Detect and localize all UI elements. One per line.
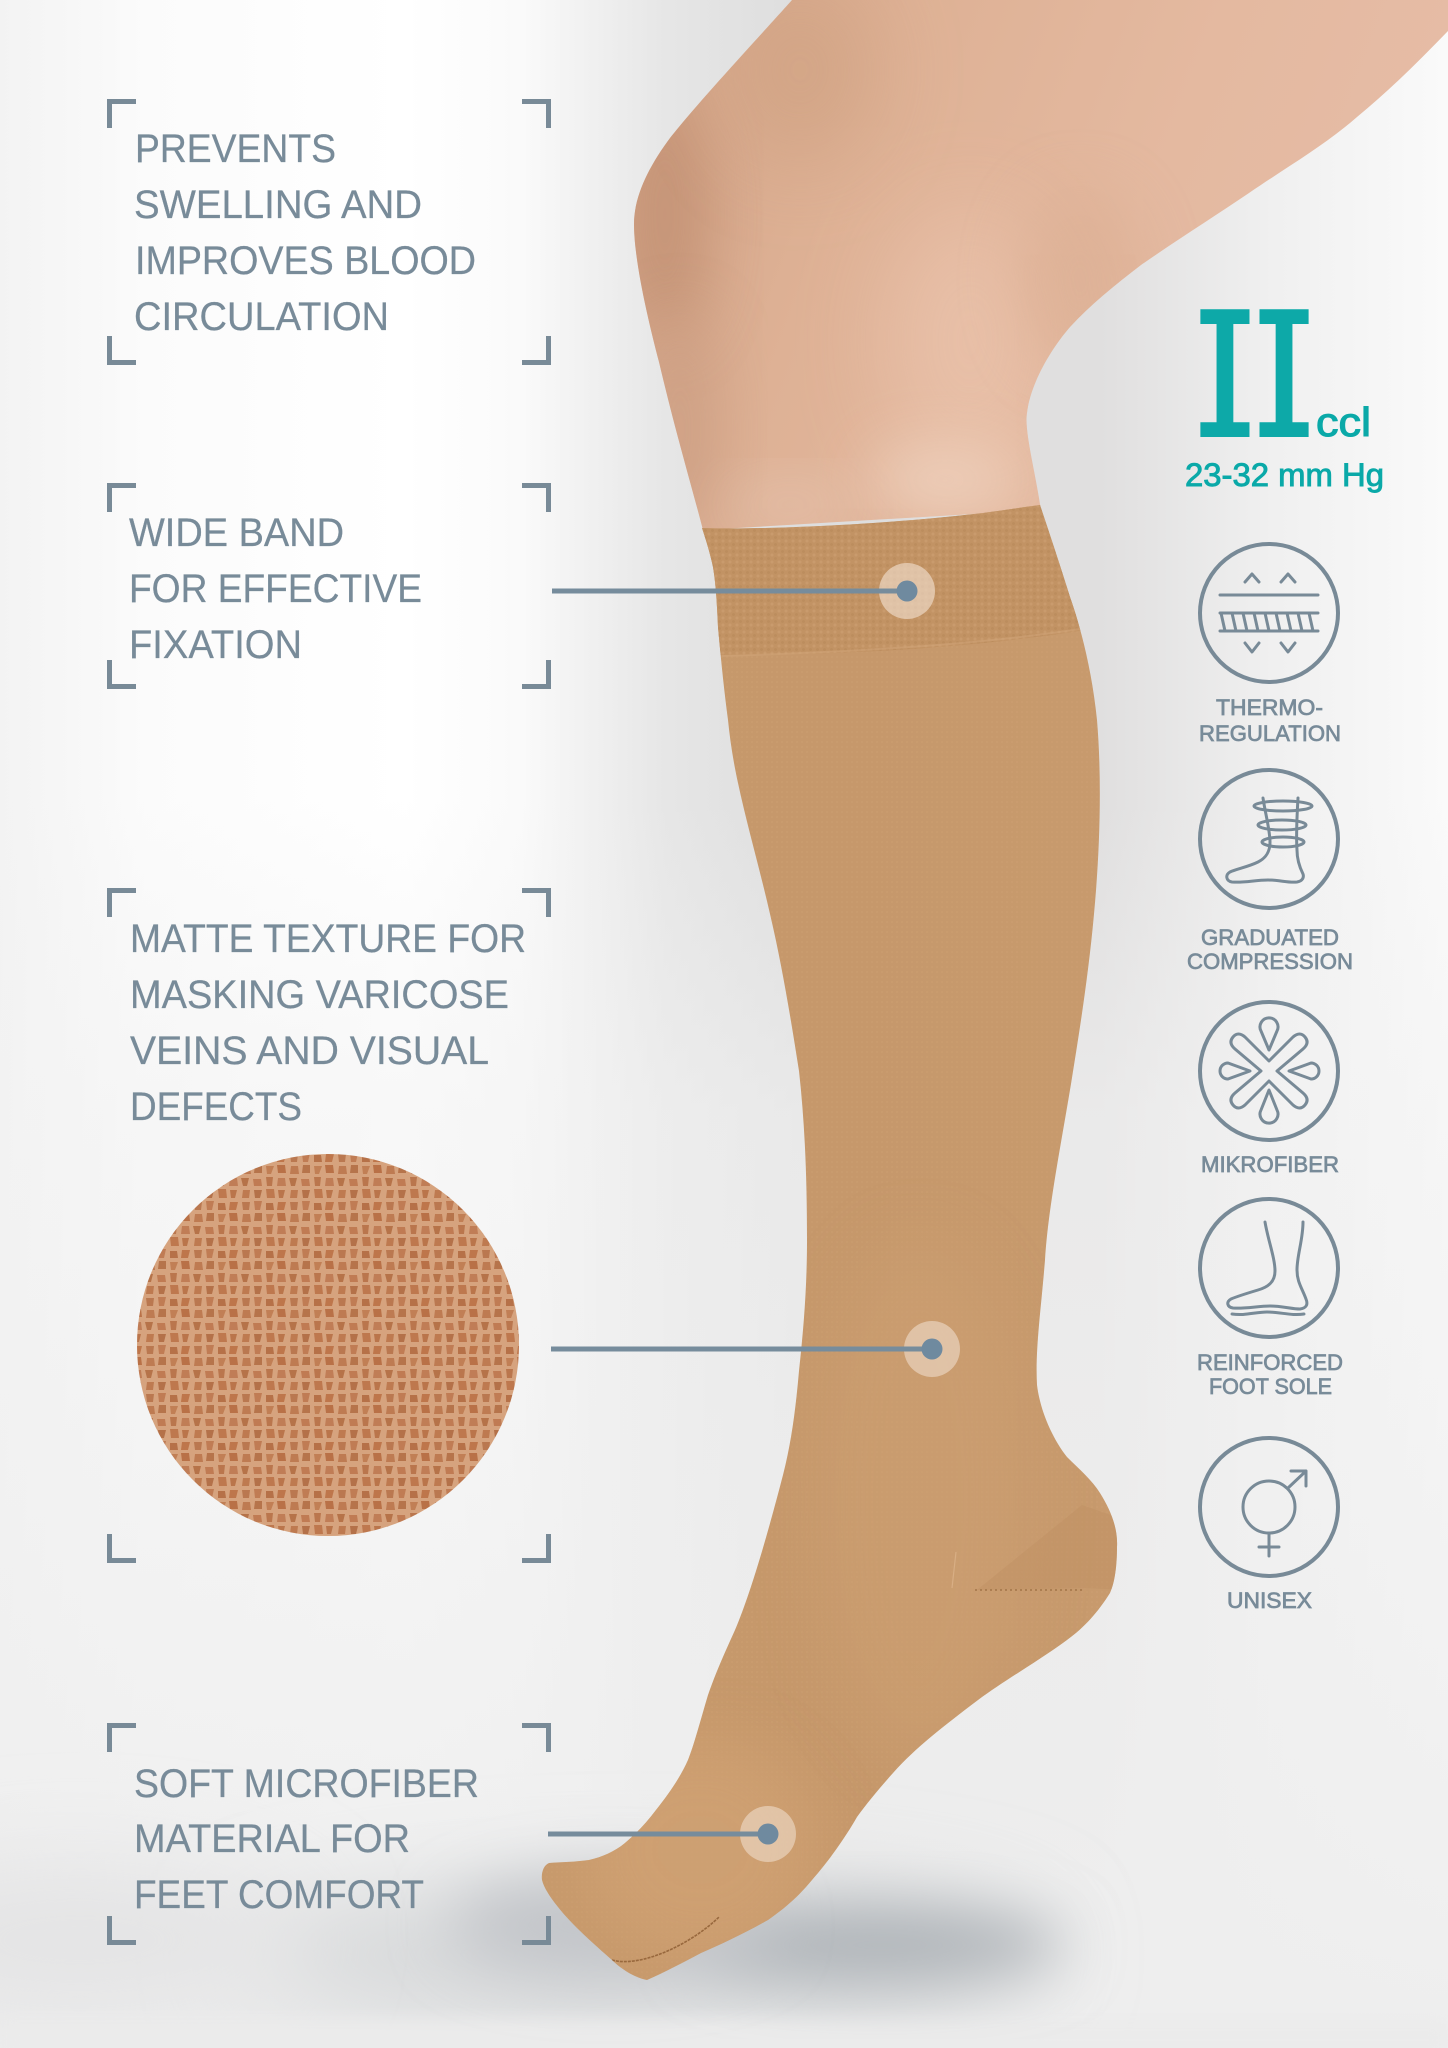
feature: graduated compression xyxy=(1187,770,1353,974)
label: UNISEX xyxy=(1227,1588,1312,1613)
label: REINFORCED xyxy=(1197,1350,1343,1375)
heel reinforcement and stitching xyxy=(952,1515,1118,1591)
label: REGULATION xyxy=(1199,721,1341,746)
floor shadow of the foot xyxy=(450,1877,1065,1981)
corner brackets xyxy=(107,483,551,689)
knitted wide band xyxy=(695,500,1086,656)
text block xyxy=(134,127,476,339)
icon: male and female symbol xyxy=(1200,1438,1338,1576)
callout pointer: band xyxy=(552,563,935,619)
icon: fabric layers with arrows xyxy=(1200,544,1338,682)
roman numeral II xyxy=(1194,275,1316,495)
feature: mikrofiber xyxy=(1200,1002,1339,1177)
label: GRADUATED xyxy=(1201,925,1339,950)
label: MIKROFIBER xyxy=(1201,1152,1339,1177)
label xyxy=(1187,925,1353,974)
text block xyxy=(134,1762,479,1917)
label: FOOT SOLE xyxy=(1209,1374,1332,1399)
feature: reinforced foot sole xyxy=(1197,1199,1343,1399)
compression class badge xyxy=(1185,275,1384,495)
corner brackets xyxy=(107,99,551,365)
toe stitching xyxy=(612,1917,719,1962)
label: THERMO- xyxy=(1216,695,1323,720)
label xyxy=(1199,695,1341,746)
text block: MATTE TEXTURE FOR xyxy=(130,917,526,961)
panel: wide band xyxy=(107,483,551,689)
photo: compression sock xyxy=(542,505,1118,1980)
icon: star of fibres and drops xyxy=(1200,1002,1338,1140)
text block: IMPROVES BLOOD xyxy=(135,239,476,283)
photo: bare leg and knee xyxy=(600,0,1448,560)
roman numeral II: I xyxy=(1253,275,1316,495)
panel: prevents swelling xyxy=(107,99,551,365)
corner brackets xyxy=(107,888,551,1563)
panel: soft microfiber xyxy=(107,1723,551,1945)
panel: matte texture xyxy=(107,888,551,1563)
icon: sock with compression rings xyxy=(1200,770,1338,908)
text block: PREVENTS xyxy=(135,127,336,171)
text block: DEFECTS xyxy=(130,1085,302,1129)
feature: thermoregulation xyxy=(1199,544,1341,746)
text block xyxy=(130,917,526,1129)
text block: MASKING VARICOSE xyxy=(130,973,509,1017)
callout pointer: texture xyxy=(551,1321,960,1377)
text block: VEINS AND VISUAL xyxy=(130,1029,489,1073)
corner brackets xyxy=(107,1723,551,1945)
text block: MATERIAL FOR xyxy=(134,1817,410,1861)
feature: unisex xyxy=(1200,1438,1338,1613)
text block: FEET COMFORT xyxy=(134,1873,424,1917)
pressure range: 23-32 mm Hg xyxy=(1185,457,1384,493)
label xyxy=(1197,1350,1343,1399)
text block: CIRCULATION xyxy=(134,295,389,339)
text block: FIXATION xyxy=(129,623,302,667)
fabric texture swatch xyxy=(137,1154,519,1536)
text block: SOFT MICROFIBER xyxy=(134,1762,479,1806)
text block xyxy=(129,511,422,667)
ccl: ccl xyxy=(1316,399,1371,445)
text block: SWELLING AND xyxy=(134,183,422,227)
text block: FOR EFFECTIVE xyxy=(129,567,422,611)
icon: foot with sole xyxy=(1200,1199,1338,1337)
callout pointer: foot xyxy=(548,1806,796,1862)
text block: WIDE BAND xyxy=(129,511,344,555)
label: COMPRESSION xyxy=(1187,949,1353,974)
roman numeral II: I xyxy=(1194,275,1256,495)
